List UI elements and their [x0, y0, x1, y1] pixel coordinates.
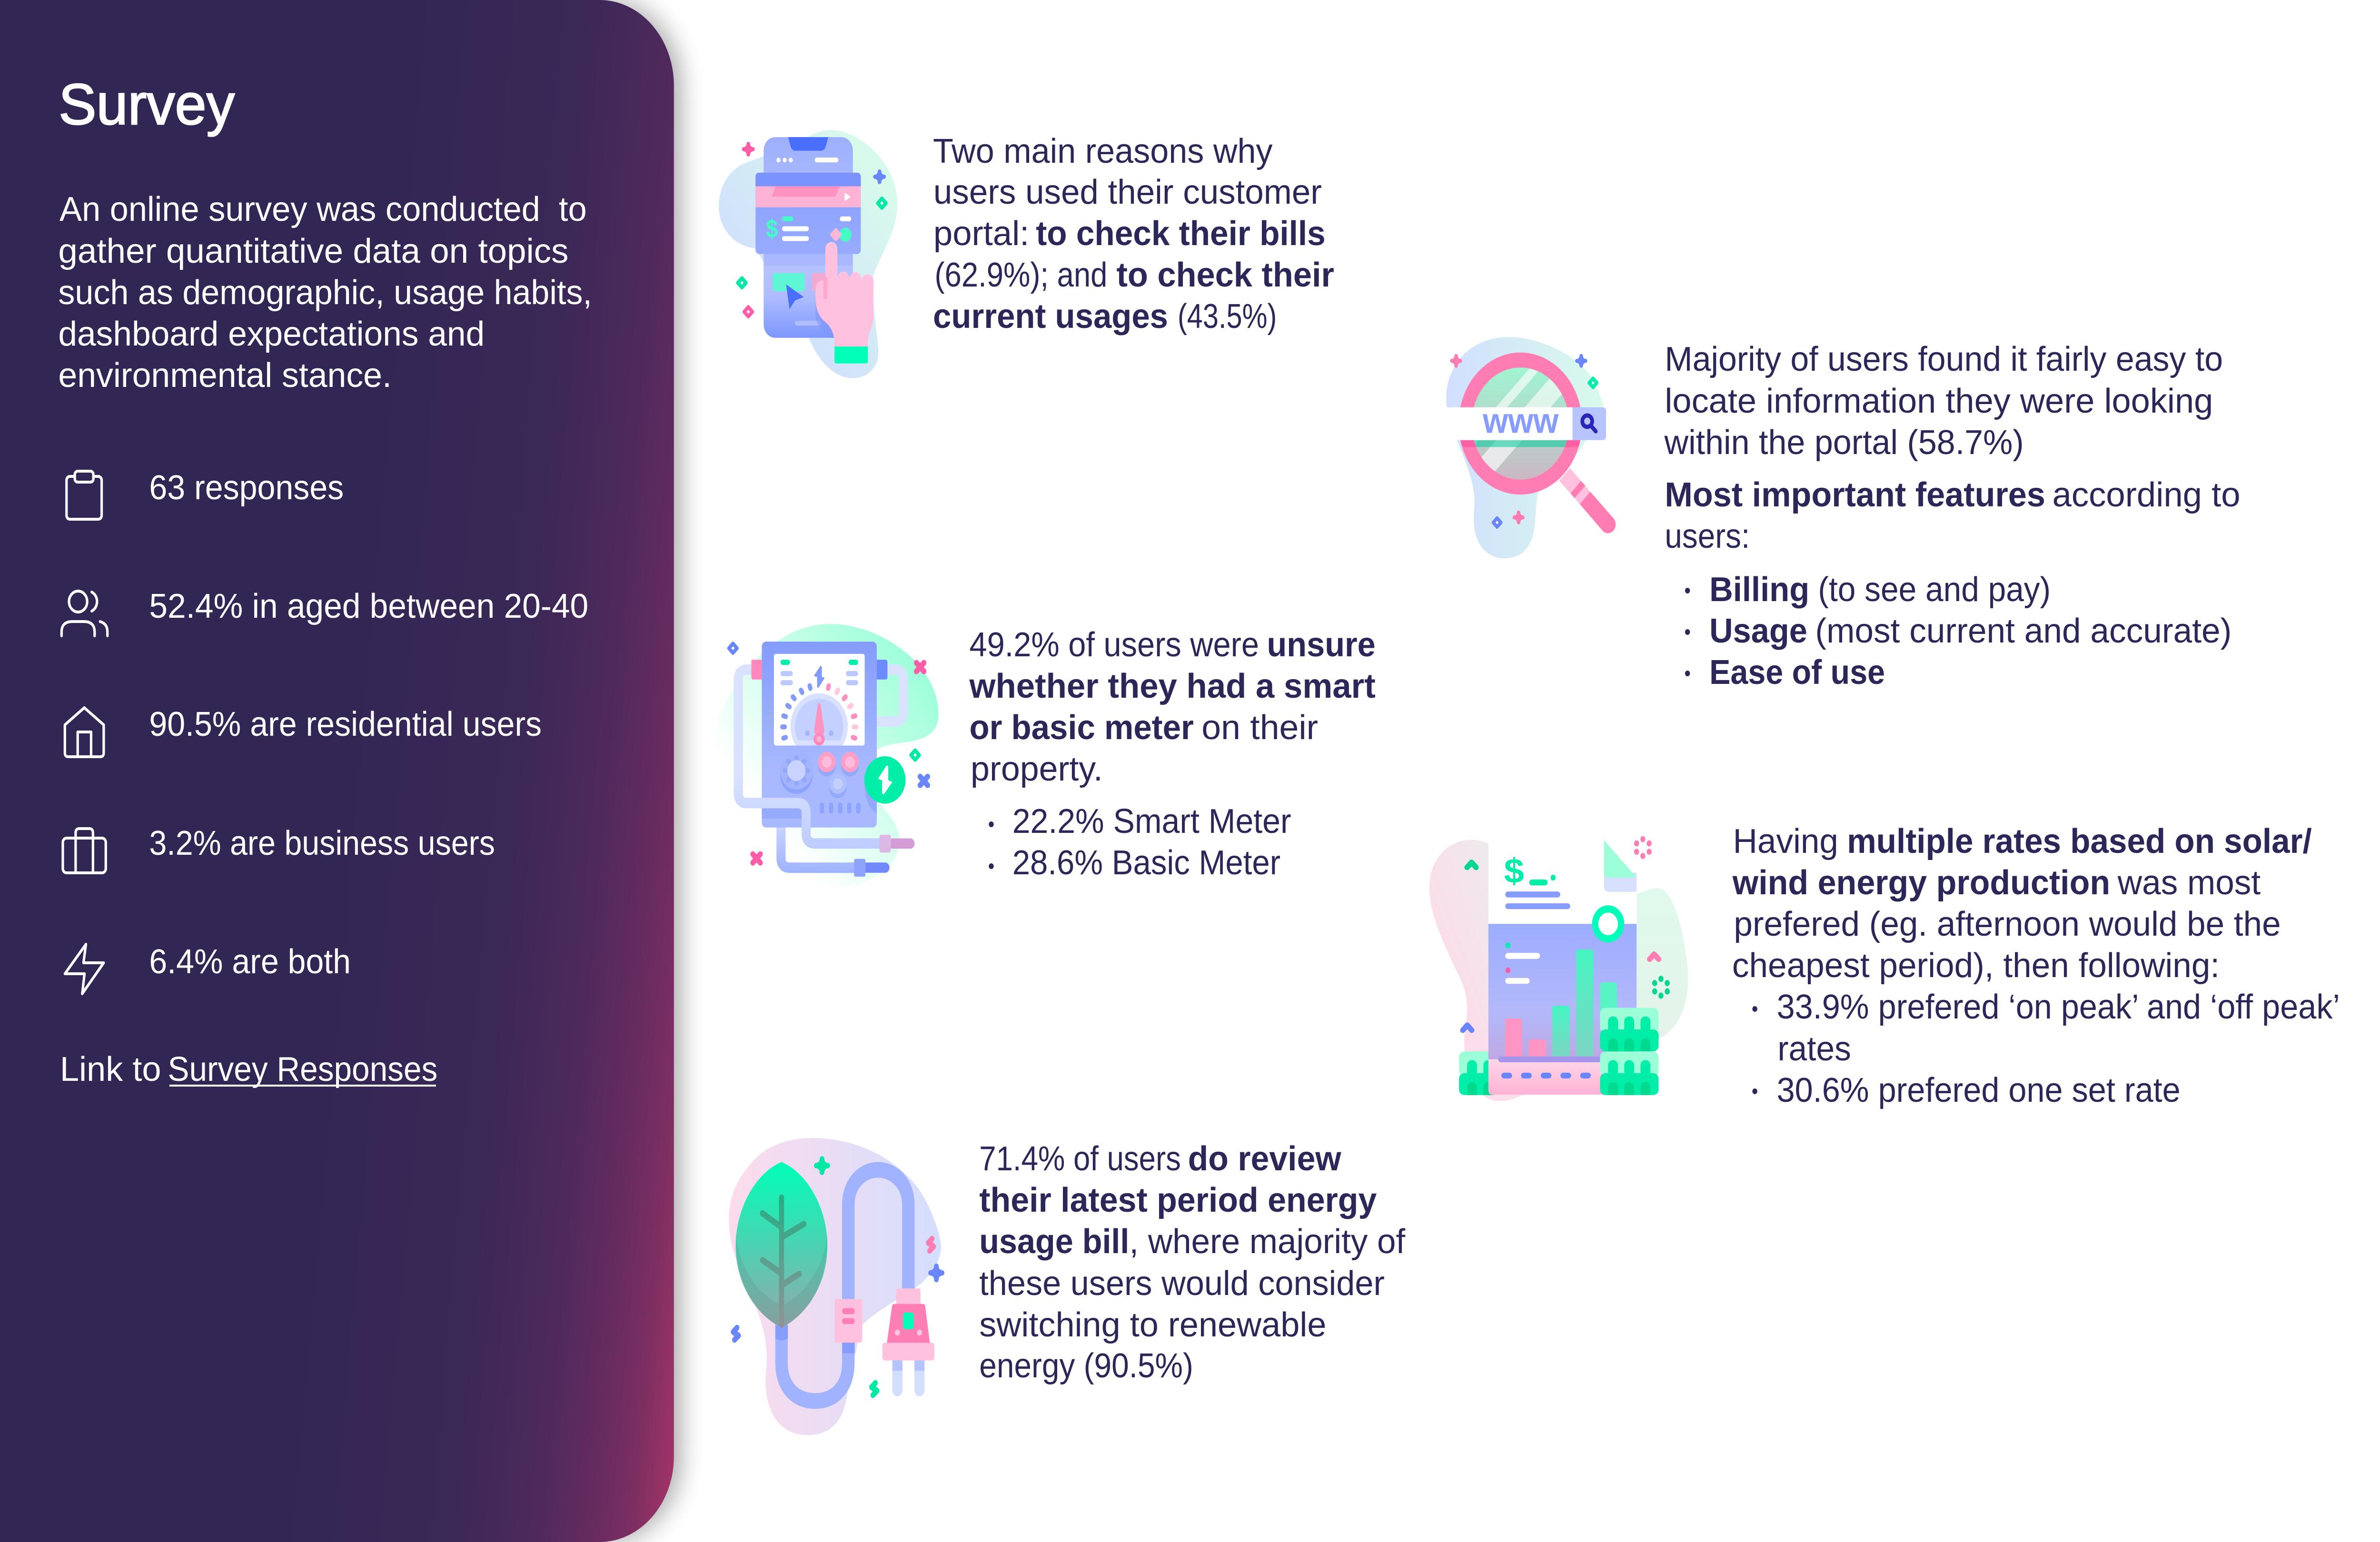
text: preferred rates: wind energy production	[1732, 864, 2110, 902]
text: ease of finding info and features: according to	[2053, 476, 2241, 514]
text: reasons for using portal: current usages	[933, 297, 1168, 336]
gauge ticks	[780, 682, 858, 741]
text: bill review and renewable energy: do review	[1188, 1140, 1341, 1178]
icon: house	[65, 708, 104, 757]
text: bill review and renewable energy: , where majority of	[1129, 1223, 1406, 1261]
text: preferred rates: multiple rates based on solar/	[1847, 822, 2312, 860]
text: smart or basic meter: 49.2% of users were	[969, 626, 1259, 664]
link: survey responses	[60, 1050, 437, 1088]
right coin stacks	[1600, 1008, 1659, 1051]
search bar	[1445, 407, 1573, 440]
link: survey responses: Link to	[60, 1050, 161, 1088]
stat: business users: 3.2% are business users	[149, 824, 495, 862]
text: smart or basic meter: whether they had a smart	[969, 667, 1376, 705]
text: preferred rates: 33.9% prefered ‘on peak’ and ‘off peak’	[1777, 988, 2340, 1026]
text: ease of finding info and features: Usage	[1709, 612, 1807, 650]
icon: phone with pointing hand: $	[766, 214, 778, 243]
text: bill review and renewable energy: their latest period energy	[979, 1181, 1377, 1219]
text: ease of finding info and features: users:	[1665, 517, 1750, 555]
plug	[892, 1360, 902, 1396]
text: smart or basic meter: 28.6% Basic Meter	[1012, 844, 1280, 882]
text: ease of finding info and features: (to see and pay)	[1818, 571, 2051, 609]
text: survey description: environmental stance.	[58, 356, 392, 395]
text: reasons for using portal	[933, 132, 1334, 336]
text: ease of finding info and features: within the portal (58.7%)	[1664, 424, 2024, 462]
icon: people	[61, 591, 108, 636]
text: reasons for using portal: users used their customer	[933, 173, 1322, 211]
text: preferred rates: cheapest period), then following:	[1732, 947, 2220, 985]
text: preferred rates: was most	[2117, 864, 2261, 902]
icon: lightning bolt	[65, 944, 104, 994]
leaf	[735, 1162, 827, 1328]
text: preferred rates: 30.6% prefered one set rate	[1777, 1071, 2181, 1109]
chart	[1488, 924, 1636, 1059]
text: preferred rates: Having	[1733, 822, 1838, 860]
text: bill review and renewable energy: energy (90.5%)	[979, 1347, 1193, 1385]
text: ease of finding info and features	[1664, 340, 2241, 692]
text: survey description: gather quantitative data on topics	[58, 232, 568, 270]
text: ease of finding info and features: (most current and accurate)	[1815, 612, 2231, 650]
document	[1488, 840, 1636, 926]
text: preferred rates: rates	[1777, 1030, 1851, 1068]
icon: bill with bar chart and coins	[1429, 836, 1688, 1101]
text: ease of finding info and features: Most important features	[1665, 476, 2045, 514]
text: smart or basic meter: on their	[1201, 709, 1318, 747]
text: smart or basic meter: property.	[971, 750, 1103, 788]
text: reasons for using portal: to check their bills	[1036, 215, 1326, 253]
text: reasons for using portal: to check their	[1116, 256, 1334, 294]
text: ease of finding info and features: locate information they were looking	[1665, 382, 2213, 420]
text: ease of finding info and features: Billing	[1709, 571, 1809, 609]
hand	[815, 242, 873, 346]
text: survey description: dashboard expectations and	[58, 315, 485, 353]
link: survey responses: Survey Responses	[168, 1050, 437, 1088]
panel: survey sidebar	[0, 0, 681, 1542]
text: bill review and renewable energy: these users would consider	[979, 1265, 1385, 1303]
text: reasons for using portal: portal:	[933, 215, 1029, 253]
text: survey description	[58, 190, 592, 395]
stat: both: 6.4% are both	[149, 943, 351, 981]
lens	[1459, 353, 1582, 494]
text: survey description: An online survey was conducted to	[60, 190, 587, 228]
text: ease of finding info and features: Ease of use	[1709, 653, 1885, 692]
text: reasons for using portal: Two main reasons why	[933, 132, 1273, 170]
stat: responses: 63 responses	[149, 469, 344, 507]
text: smart or basic meter: 22.2% Smart Meter	[1012, 802, 1291, 840]
icon: magnifier over www search bar	[1446, 337, 1616, 559]
text: smart or basic meter: unsure	[1267, 626, 1376, 664]
stat: residential users: 90.5% are residential users	[149, 705, 542, 743]
left coin stack	[1459, 1051, 1497, 1095]
heading: Survey: Survey	[59, 72, 235, 137]
text: ease of finding info and features: Majority of users found it fairly easy to	[1665, 340, 2223, 378]
text: bill review and renewable energy	[979, 1140, 1406, 1385]
icon: briefcase	[63, 829, 106, 873]
text: smart or basic meter	[969, 626, 1376, 882]
wire	[738, 670, 881, 843]
text: bill review and renewable energy: switching to renewable	[979, 1306, 1326, 1344]
icon: magnifier over www search bar: www	[1482, 401, 1559, 441]
icon: phone with pointing hand	[719, 130, 897, 378]
icon: electric meter	[712, 624, 939, 889]
icon: clipboard	[67, 471, 102, 519]
icon: leaf and power plug	[729, 1138, 944, 1435]
icon: bill with bar chart and coins: $	[1504, 852, 1524, 890]
text: preferred rates	[1732, 822, 2340, 1109]
connector: pink	[751, 660, 762, 680]
text: reasons for using portal: (62.9%); and	[935, 256, 1107, 294]
stat: age: 52.4% in aged between 20-40	[149, 587, 588, 625]
handle	[1559, 468, 1590, 504]
text: bill review and renewable energy: usage bill	[979, 1223, 1129, 1261]
text: survey description: such as demographic, usage habits,	[58, 274, 592, 312]
text: reasons for using portal: (43.5%)	[1178, 297, 1277, 336]
text: bill review and renewable energy: 71.4% of users	[979, 1140, 1181, 1178]
knob	[780, 756, 813, 794]
text: preferred rates: prefered (eg. afternoon would be the	[1734, 905, 2281, 943]
text: smart or basic meter: or basic meter	[969, 709, 1194, 747]
